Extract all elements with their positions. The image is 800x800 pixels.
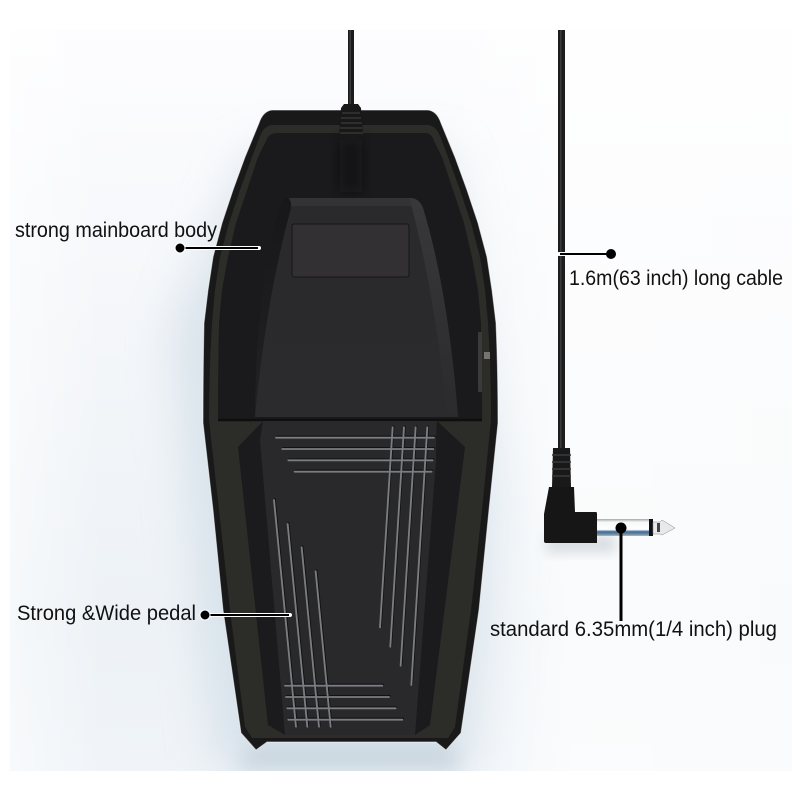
callout: plug: [490, 522, 777, 641]
callout: mainboard body: [15, 219, 259, 253]
callout: plug: standard 6.35mm(1/4 inch) plug: [490, 618, 777, 641]
callout: pedal: [17, 602, 290, 625]
recessed well: [218, 133, 482, 420]
outer housing: [203, 110, 498, 750]
leader line: [205, 613, 290, 617]
angled body: [544, 487, 597, 543]
raised hood: [255, 198, 458, 417]
hood top edge: [288, 198, 414, 206]
leader line: [180, 246, 259, 250]
callout: cable length: [559, 249, 783, 290]
leader line: [559, 252, 611, 256]
hood left shadow: [255, 198, 291, 417]
groove shadows: [275, 426, 435, 726]
top cable: [348, 30, 354, 105]
pedal unit: [203, 30, 498, 750]
cable shadow: [340, 140, 362, 192]
leader line: [620, 528, 622, 621]
display window: [292, 224, 409, 277]
side switch: [478, 332, 490, 392]
metal shaft: [597, 519, 649, 536]
groove highlights: [274, 427, 434, 727]
hood right ridge: [410, 198, 458, 417]
callout: cable length: 1.6m(63 inch) long cable: [569, 267, 783, 290]
callout: pedal: Strong &Wide pedal: [17, 602, 196, 625]
pedal plate wings: [238, 421, 465, 735]
pedal plate: [260, 421, 437, 735]
callout: mainboard body: strong mainboard body: [15, 219, 217, 242]
shadow under plug: [546, 535, 616, 553]
well bottom edge: [218, 419, 482, 421]
angled jack plug: [544, 448, 675, 553]
strain relief ribs: [552, 448, 571, 487]
insulating ring: [649, 519, 653, 536]
cable: [558, 30, 565, 450]
pedal texture lines: [274, 426, 435, 727]
rim band: [209, 125, 491, 738]
strain relief: [339, 104, 363, 141]
metal tip: [653, 520, 675, 535]
